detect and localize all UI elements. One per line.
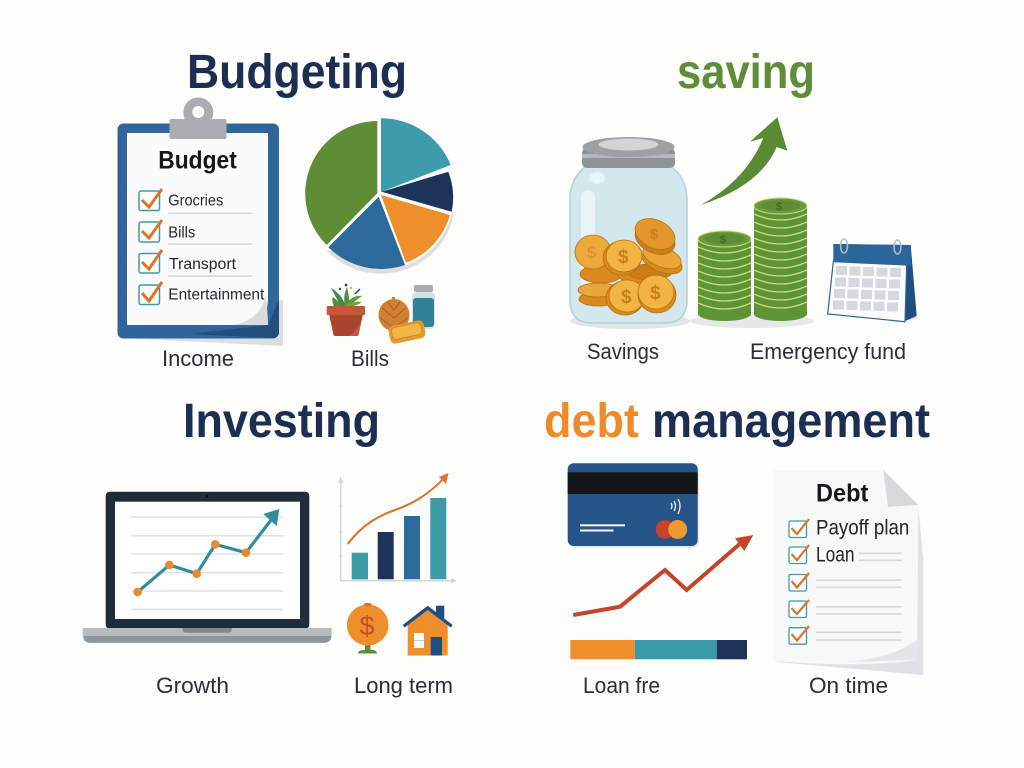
- stack: tall: $: [776, 201, 782, 213]
- title: debt management: debt: [544, 395, 639, 448]
- stack: short: $: [720, 234, 726, 246]
- panel: budgeting: [118, 46, 454, 371]
- label: Emergency fund: Emergency fund: [750, 339, 906, 364]
- checklist row: blank 1: [789, 573, 902, 591]
- icon: budget clipboard: [118, 98, 283, 346]
- label: On time: On time: [809, 673, 888, 698]
- icon: jar of coins: $: [587, 243, 597, 262]
- label: Growth: Growth: [156, 673, 229, 698]
- checklist row: Transport: [139, 250, 252, 277]
- checklist row: Bills: Bills: [168, 225, 196, 242]
- icon: house: [403, 606, 453, 656]
- chart: budget pie: [305, 118, 454, 274]
- title: saving: saving: [677, 46, 815, 99]
- checklist row: Grocries: Grocries: [168, 193, 224, 210]
- title: debt management: management: [652, 395, 930, 448]
- jar lid: [582, 137, 675, 168]
- checklist row: blank 2: [789, 600, 902, 618]
- icon: laptop with line chart: [83, 492, 332, 643]
- icon: money bag: $: [360, 611, 375, 641]
- chart: segmented bar: [570, 640, 747, 659]
- checklist row: Entertainment: [139, 282, 265, 304]
- label: Bills: Bills: [351, 346, 389, 371]
- icon: debt checklist document: Debt: [816, 480, 869, 508]
- icon: jar of coins: $: [650, 226, 659, 243]
- icon: pine cone, jar and soap: [378, 285, 435, 345]
- coin pile: [575, 212, 685, 315]
- icon: money bag: [347, 603, 389, 654]
- title: debt management: [544, 395, 930, 448]
- icon: potted plant: [327, 284, 365, 336]
- panel: debt management: [544, 395, 930, 698]
- panel: investing: [83, 395, 457, 698]
- checklist row: Grocries: [139, 189, 252, 214]
- icon: jar of coins: [570, 137, 690, 329]
- checklist row: Loan: [789, 544, 902, 567]
- icon: debt checklist document: [773, 470, 923, 675]
- checklist row: Entertainment: Entertainment: [168, 286, 265, 303]
- title: Investing: Investing: [183, 395, 380, 448]
- checklist row: blank 3: [789, 626, 902, 644]
- icon: credit card: [568, 463, 699, 548]
- label: Long term: Long term: [354, 673, 453, 698]
- icon: jar of coins: $: [650, 283, 661, 304]
- label: Income: Income: [162, 346, 234, 371]
- chart: bar chart with trend: [338, 473, 457, 584]
- label: Loan fre: Loan fre: [583, 673, 660, 698]
- checklist row: Loan: Loan: [816, 544, 854, 567]
- arrow: rising debt trend: [573, 535, 753, 615]
- checklist row: Transport: Transport: [169, 256, 237, 273]
- arrow: growth: [701, 117, 787, 205]
- panel: saving: [570, 46, 920, 364]
- icon: jar of coins: $: [618, 247, 629, 268]
- icon: budget clipboard: Budget: [158, 147, 237, 175]
- title: Budgeting: Budgeting: [187, 46, 407, 99]
- label: Savings: Savings: [587, 339, 659, 364]
- checklist row: Payoff plan: Payoff plan: [816, 516, 909, 539]
- icon: jar of coins: $: [621, 287, 632, 308]
- icon: coin stacks: [690, 198, 814, 328]
- checklist row: Bills: [139, 220, 252, 245]
- icon: calendar: [828, 239, 920, 322]
